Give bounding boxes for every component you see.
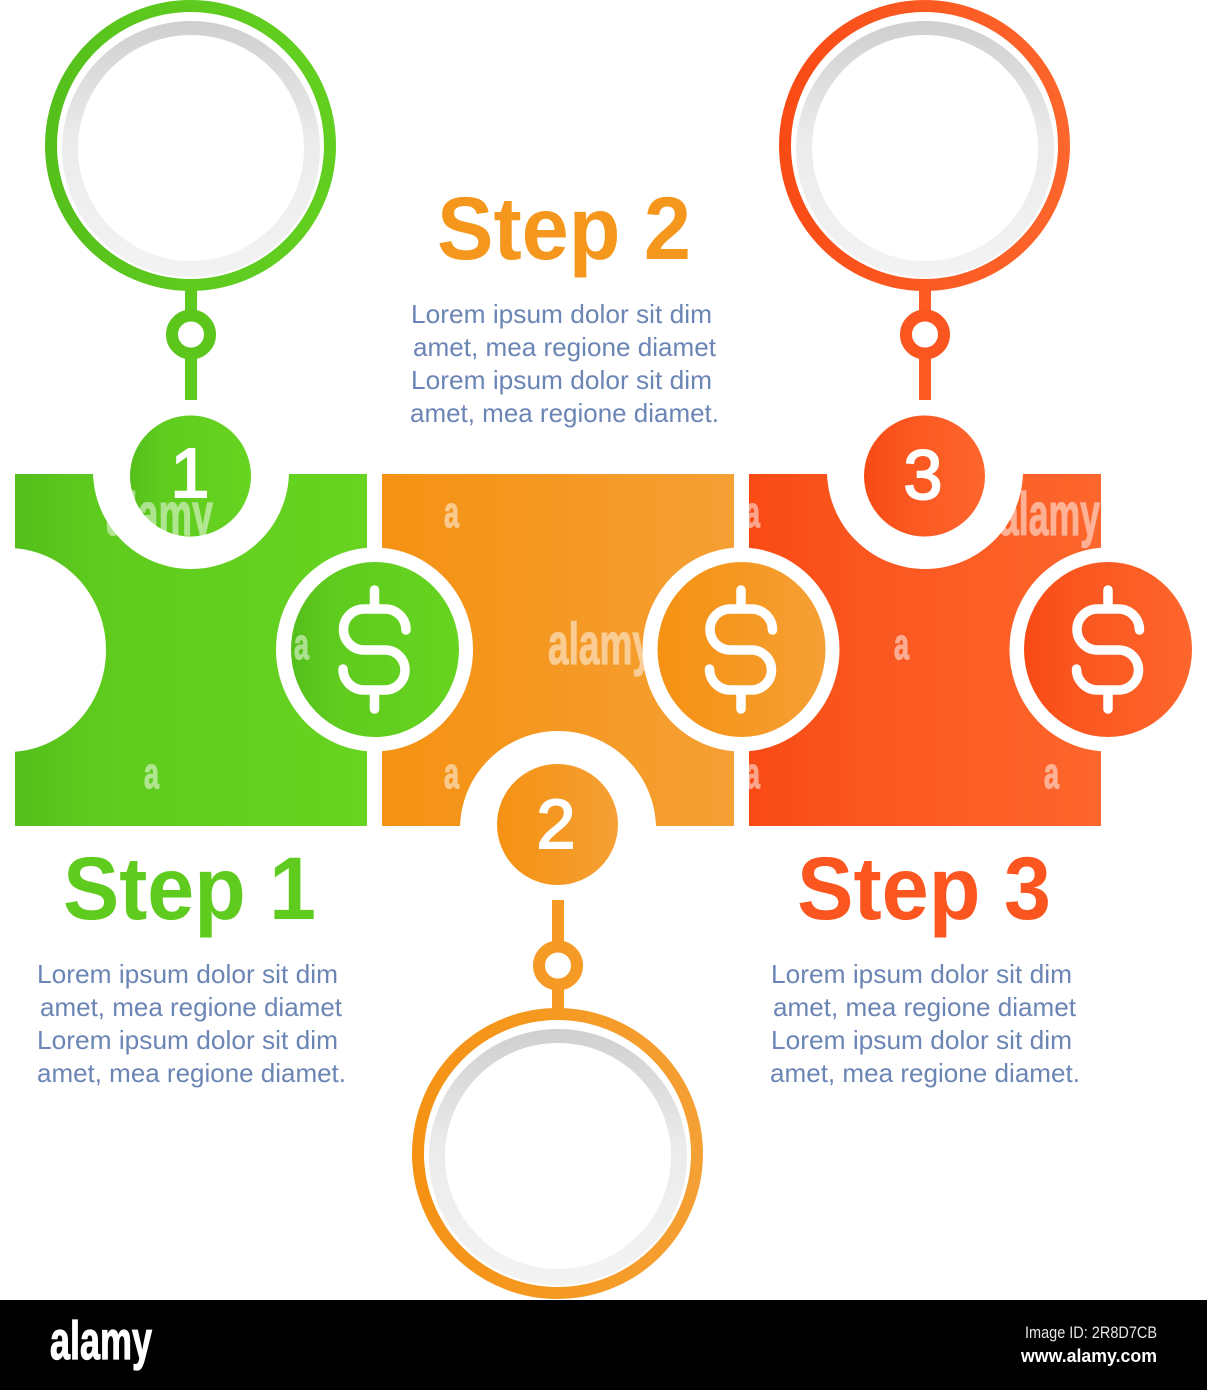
number badge 2 [497, 764, 618, 885]
text block: step 1 description [37, 959, 346, 1088]
text block: step 2 description: amet, mea regione diamet. [410, 398, 719, 428]
number badge 2: 2 [537, 785, 575, 863]
watermarks on the panels: a [294, 620, 309, 669]
text block: step 1 description: Lorem ipsum dolor sit dim [37, 1025, 338, 1055]
empty icon circle 3 with connector [785, 6, 1064, 400]
icon: step 2 dollar badge [658, 562, 826, 737]
text block: step 2 description [410, 299, 719, 428]
watermarks on the panels: a [444, 749, 459, 798]
text block: step 1 description: amet, mea regione diamet [40, 992, 343, 1022]
watermarks on the panels: a [745, 488, 760, 537]
watermarks on the panels: alamy [106, 481, 213, 548]
text block: step 3 description: Lorem ipsum dolor sit dim [771, 959, 1072, 989]
watermarks on the panels: a [444, 488, 459, 537]
text block: step 1 description: amet, mea regione diamet. [37, 1058, 346, 1088]
text block: step 3 description: Lorem ipsum dolor sit dim [771, 1025, 1072, 1055]
text block: step 2 description: Lorem ipsum dolor sit dim [411, 299, 712, 329]
watermarks on the panels: alamy [999, 481, 1100, 548]
icon: step 3 dollar badge [1024, 562, 1192, 737]
heading: step 2: Step 2 [437, 178, 691, 278]
footer bar: www.alamy.com [1020, 1346, 1157, 1366]
number badge 1 [130, 416, 251, 536]
watermarks on the panels: alamy [548, 612, 653, 677]
footer bar [0, 1300, 1207, 1390]
text block: step 2 description: amet, mea regione diamet [413, 332, 717, 362]
watermarks on the panels: a [894, 620, 909, 669]
watermarks on the panels [106, 481, 1100, 798]
panel: step 3 puzzle piece [642, 373, 1206, 826]
watermarks on the panels: a [745, 749, 760, 798]
footer bar: alamy [50, 1311, 152, 1371]
empty icon circle 2 with connector [418, 900, 697, 1293]
empty icon circle 1 with connector [51, 6, 330, 400]
panel: step 1 puzzle piece [0, 373, 367, 826]
number badge 1: 1 [171, 434, 209, 512]
text block: step 1 description: Lorem ipsum dolor sit dim [37, 959, 338, 989]
panel: step 2 puzzle piece [276, 474, 734, 927]
icon: step 1 dollar badge [291, 562, 459, 737]
heading: step 1: Step 1 [63, 838, 316, 938]
text block: step 3 description: amet, mea regione diamet [773, 992, 1077, 1022]
watermarks on the panels: a [1044, 749, 1059, 798]
heading: step 3: Step 3 [797, 838, 1051, 938]
text block: step 2 description: Lorem ipsum dolor sit dim [411, 365, 712, 395]
text block: step 3 description [770, 959, 1080, 1088]
watermarks on the panels: a [144, 749, 159, 798]
number badge 3: 3 [904, 436, 942, 514]
footer bar: Image ID: 2R8D7CB [1025, 1323, 1157, 1342]
text block: step 3 description: amet, mea regione diamet. [770, 1058, 1080, 1088]
number badge 3 [864, 416, 985, 536]
